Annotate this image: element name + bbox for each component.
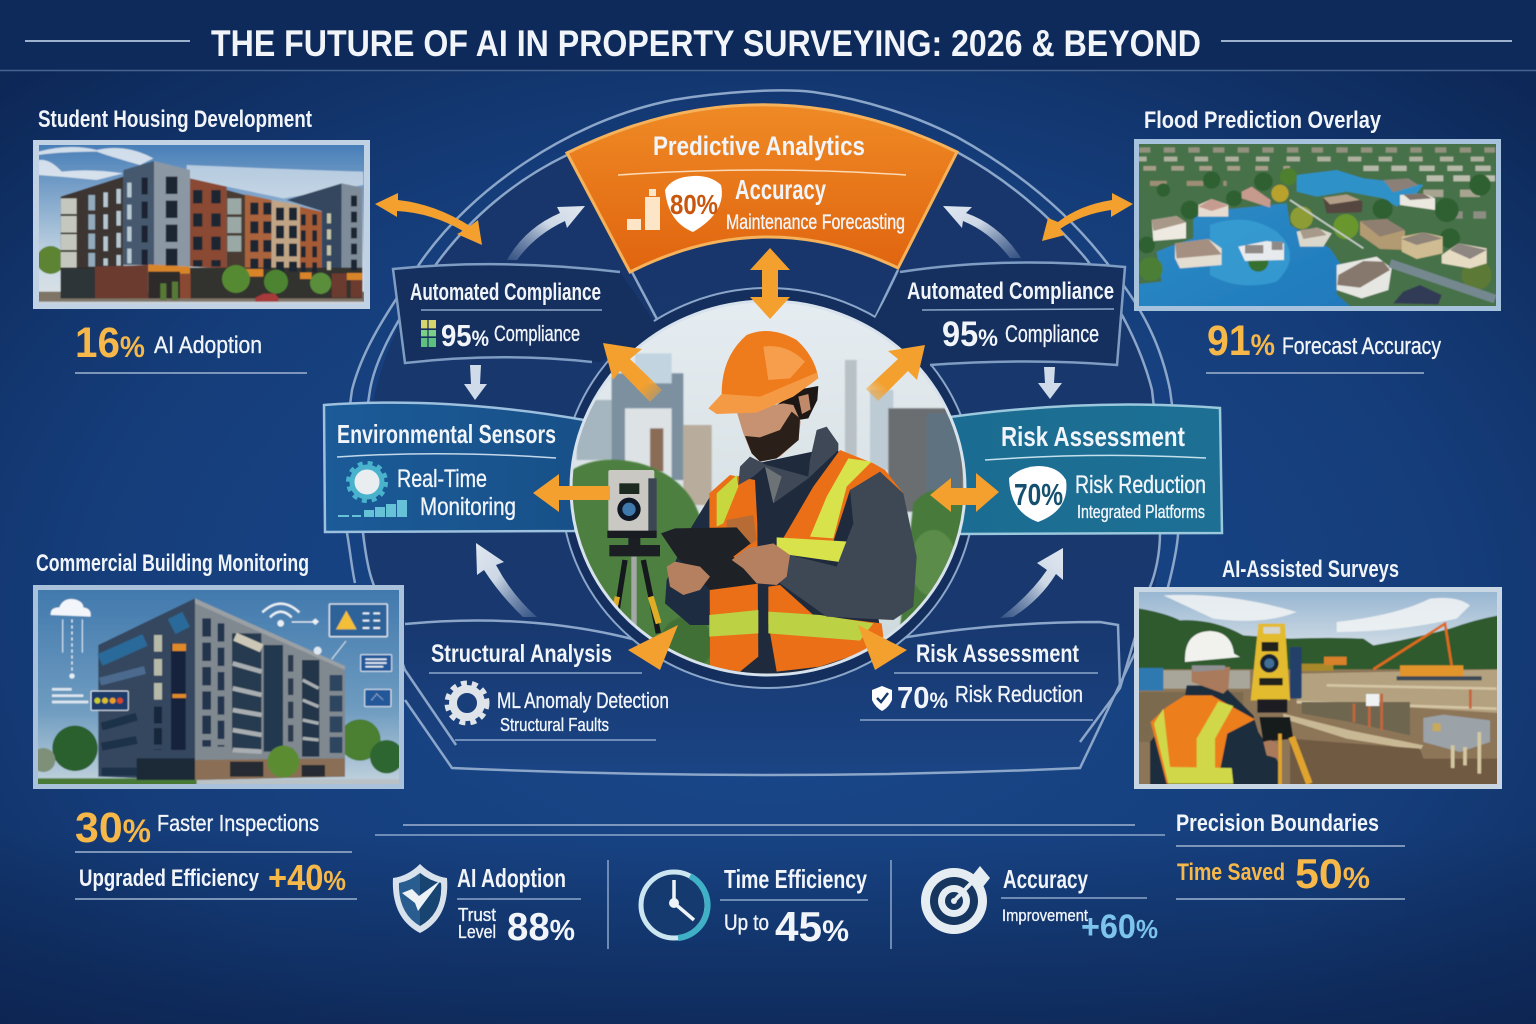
stat: 16 percent ai adoption	[75, 319, 307, 373]
overlay: status lights	[91, 691, 128, 710]
tripod	[609, 537, 660, 633]
icon: clock	[641, 872, 708, 938]
jacket left arm	[665, 497, 710, 625]
icon: shield 70 percent	[1009, 466, 1066, 522]
stat: ai adoption trust level: AI Adoption	[457, 863, 566, 893]
panel: predictive analytics	[567, 105, 957, 272]
panel: environmental sensors	[324, 403, 590, 532]
text block: precision boundaries: Time Saved	[1177, 859, 1285, 886]
hair	[777, 386, 818, 420]
face	[737, 403, 801, 462]
tablet	[661, 527, 760, 590]
houses	[1152, 178, 1487, 304]
caption: student housing development: Student Housing Development	[38, 106, 312, 133]
stat: ai adoption trust level: Level	[458, 922, 496, 942]
building	[98, 598, 195, 780]
surveyor head	[1192, 667, 1230, 694]
panel: automated compliance right	[873, 263, 1125, 365]
text: 70 percent: 70%	[897, 680, 948, 715]
text: accuracy: Accuracy	[735, 174, 826, 205]
ground floor	[137, 758, 195, 780]
overlay: alert	[329, 604, 387, 637]
total station	[607, 470, 657, 538]
photo: student housing development	[30, 106, 375, 315]
stat: accuracy improvement: Accuracy	[1003, 864, 1088, 894]
overlay: info cards	[361, 655, 392, 671]
treeline	[1130, 607, 1508, 670]
stat: 91 percent forecast accuracy: 91%	[1207, 317, 1275, 365]
text: maintenance forecasting: Maintenance Forecasting	[726, 211, 905, 234]
site ground	[1130, 669, 1508, 794]
label: risk reduction bottom: Risk Reduction	[955, 681, 1083, 707]
arrow: hub to risk	[930, 473, 999, 512]
vest left panel	[709, 475, 758, 672]
icon: bars and shield with 80 percent	[627, 176, 722, 232]
arrow: hub to risk bottom	[858, 625, 907, 670]
arrow: hub to wedge	[750, 248, 790, 319]
text: integrated platforms: Integrated Platforms	[1077, 502, 1205, 522]
stat: accuracy improvement: +60%	[1081, 908, 1158, 946]
panel: risk assessment bottom	[860, 640, 1098, 720]
collar	[738, 427, 838, 503]
heading: environmental sensors: Environmental Sensors	[337, 419, 556, 449]
icon: compliance grid left	[421, 320, 436, 347]
stat: accuracy improvement: Improvement	[1002, 906, 1088, 925]
stat: 30 percent faster inspections: Faster Inspections	[157, 810, 319, 836]
label: compliance right: Compliance	[1005, 321, 1099, 348]
arrow: photo 2 to wedge	[1042, 193, 1133, 241]
flood water	[1139, 202, 1351, 306]
arrow: hub to structural	[628, 625, 678, 670]
arrow: hub to compliance left	[603, 343, 662, 402]
trees	[1138, 168, 1492, 290]
central ring diagram frame	[346, 90, 1178, 775]
left face windows	[100, 619, 186, 772]
heading: automated compliance right: Automated Compliance	[907, 278, 1114, 305]
panel: risk assessment right	[950, 405, 1222, 534]
overlay: cloud and rain	[51, 599, 91, 617]
heading: structural analysis: Structural Analysis	[431, 640, 612, 668]
windows	[92, 177, 354, 272]
text: 95 percent compliance left: 95%	[441, 318, 489, 353]
vest right panel upper	[778, 450, 903, 547]
stat: upgraded efficiency: +40%	[268, 857, 346, 898]
stat: 30 percent faster inspections: 30%	[75, 804, 151, 852]
icon: target	[921, 866, 990, 934]
panel: structural analysis	[429, 640, 669, 740]
text block: precision boundaries	[1176, 810, 1405, 899]
title bar: THE FUTURE OF AI IN PROPERTY SURVEYING: 2026 & BEYOND	[211, 23, 1201, 64]
equipment box	[1423, 715, 1490, 752]
text block: precision boundaries: Precision Boundaries	[1176, 810, 1379, 837]
icon: small shield check	[872, 686, 892, 711]
text: structural faults: Structural Faults	[500, 715, 609, 735]
illustration: surveyor in central circle	[572, 302, 964, 674]
stat: time efficiency: Up to	[724, 910, 769, 935]
beard	[745, 412, 800, 462]
heading: predictive analytics: Predictive Analytics	[653, 131, 865, 161]
road	[1390, 263, 1495, 299]
text: ml anomaly detection: ML Anomaly Detection	[497, 688, 669, 713]
arrow: hub to sensors	[533, 474, 610, 512]
photo: flood prediction overlay	[1130, 107, 1505, 315]
city towers	[577, 353, 963, 512]
stat: ai adoption trust level: 88%	[507, 906, 575, 949]
text: real-time monitoring: Real-Time	[397, 465, 487, 493]
caption: commercial building monitoring: Commercial Building Monitoring	[36, 550, 309, 577]
neighbourhood texture	[1133, 150, 1495, 215]
panel: automated compliance left	[393, 264, 660, 363]
text block: precision boundaries: 50%	[1295, 850, 1370, 897]
panel: environmental sensors: Monitoring	[420, 493, 516, 521]
heading: risk assessment bottom: Risk Assessment	[916, 640, 1080, 668]
icon: gear	[447, 683, 487, 723]
stat: ai adoption trust level	[457, 863, 581, 949]
overlay: lines	[52, 689, 88, 702]
ear	[798, 394, 811, 414]
icon: shield	[393, 864, 447, 933]
text: 95 percent compliance right: 95%	[942, 315, 998, 354]
trees	[52, 726, 98, 771]
icon: shield 70 percent: 70%	[1014, 477, 1063, 512]
icon: bars and shield with 80 percent: 80%	[670, 189, 718, 220]
bottom stats strip	[375, 825, 1165, 950]
jacket right arm	[780, 472, 917, 620]
title bar	[0, 0, 1536, 70]
heading: risk assessment: Risk Assessment	[1001, 421, 1185, 452]
building masses	[61, 177, 123, 298]
arrows: flow curves	[464, 206, 1063, 618]
icon: sensor gear and signal bars	[338, 463, 407, 517]
heading: automated compliance left: Automated Compliance	[410, 279, 601, 306]
stat: upgraded efficiency: Upgraded Efficiency	[79, 865, 259, 892]
arrow: hub to compliance right	[866, 345, 925, 401]
stat: 16 percent ai adoption: AI Adoption	[154, 332, 262, 359]
stat: time efficiency: 45%	[775, 903, 849, 950]
hands	[732, 543, 790, 585]
caption: flood prediction overlay: Flood Prediction Overlay	[1144, 107, 1382, 134]
photo: ai-assisted surveys	[1130, 556, 1508, 794]
arrow: photo 1 to wedge	[375, 193, 482, 245]
vest right panel lower	[768, 585, 883, 672]
label: compliance left: Compliance	[494, 321, 580, 346]
stat: 16 percent ai adoption: 16%	[75, 319, 145, 367]
hard hat	[722, 331, 818, 402]
stat: time efficiency: Time Efficiency	[724, 864, 867, 894]
overlay: wifi	[262, 604, 299, 617]
stat: time efficiency	[720, 864, 868, 950]
right face windows	[207, 618, 336, 757]
wall and container	[1163, 670, 1250, 689]
central circle outline	[571, 301, 965, 675]
text: risk reduction: Risk Reduction	[1075, 471, 1206, 499]
photo: commercial building monitoring	[30, 550, 410, 797]
hub ring	[561, 288, 975, 688]
arrows: orange connectors	[375, 193, 1133, 670]
stat: upgraded efficiency	[75, 857, 357, 899]
stat: 30 percent faster inspections	[75, 804, 352, 852]
trees	[572, 458, 963, 666]
torso base	[723, 450, 880, 674]
trees and car	[222, 265, 250, 293]
stat: ai adoption trust level: Trust	[458, 905, 496, 925]
envelope	[727, 515, 757, 545]
surveyor body	[1150, 685, 1278, 794]
total station	[1290, 647, 1302, 699]
stat: accuracy improvement	[1001, 864, 1158, 946]
signs and posts	[1366, 694, 1379, 706]
stat: 91 percent forecast accuracy: Forecast Accuracy	[1282, 333, 1441, 360]
caption: ai-assisted surveys: AI-Assisted Surveys	[1222, 556, 1399, 583]
crane	[1373, 624, 1452, 669]
stat: 91 percent forecast accuracy	[1206, 317, 1441, 373]
